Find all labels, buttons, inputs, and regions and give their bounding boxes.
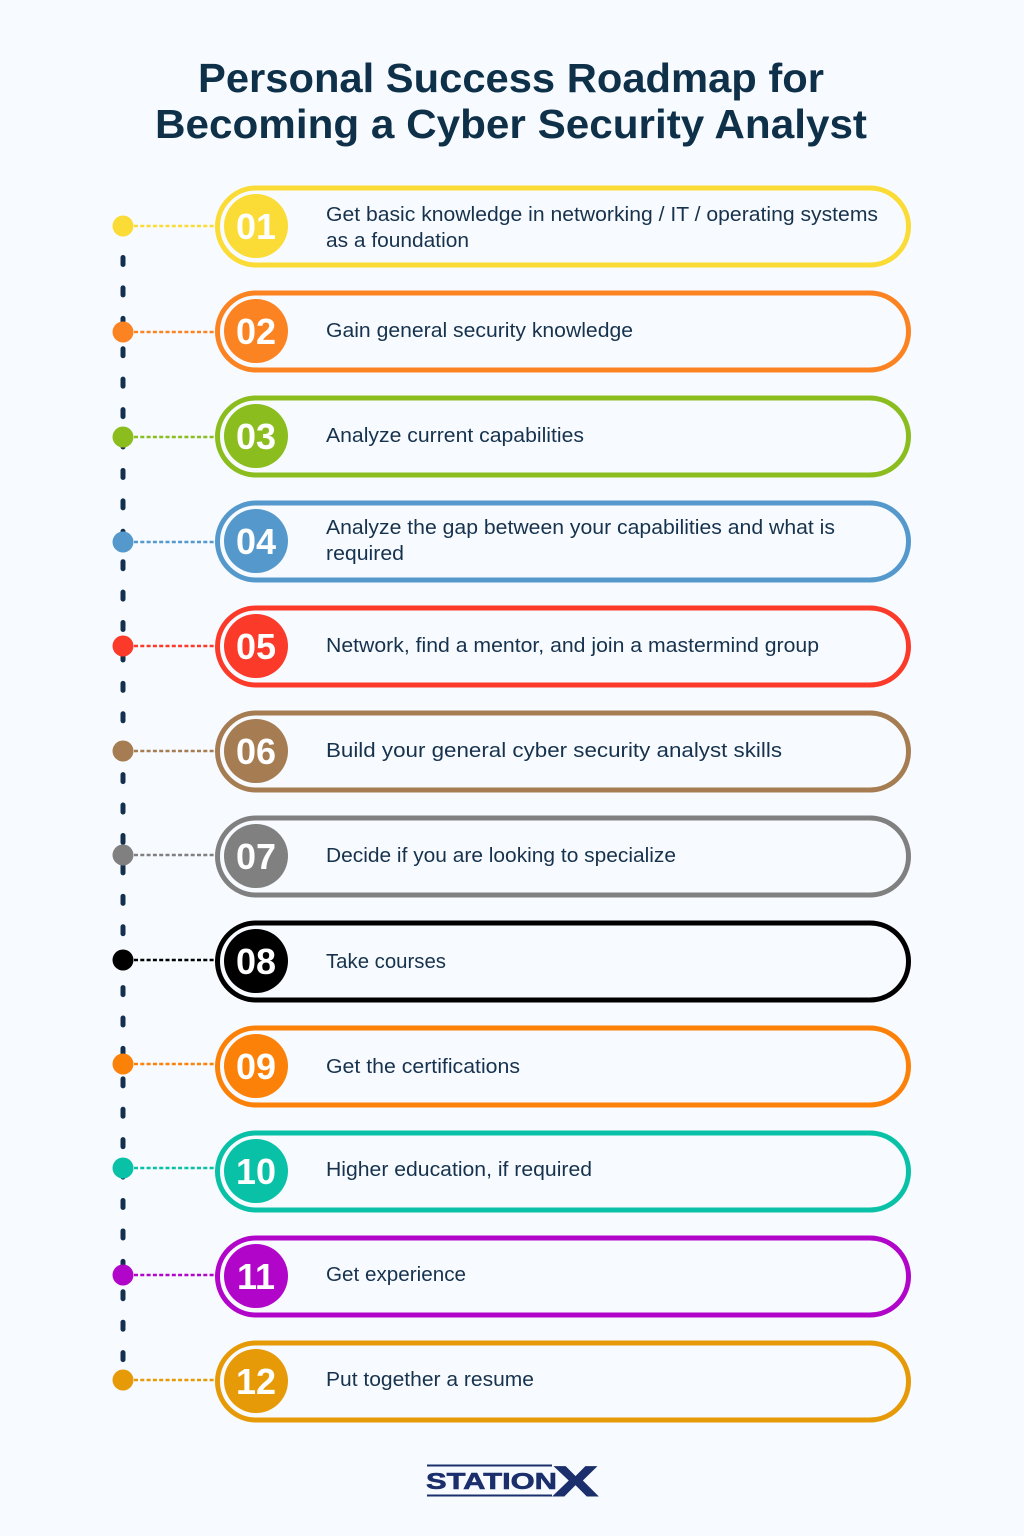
title: Personal Success Roadmap for: [198, 55, 824, 101]
step 07: [112, 818, 908, 895]
title: [155, 55, 867, 147]
step 01: 01: [236, 206, 276, 247]
step 12: 12: [236, 1361, 276, 1402]
step 03: [112, 398, 908, 475]
step 06: Build your general cyber security analyst skills: [326, 740, 782, 762]
step 04: required: [326, 543, 404, 565]
step 12: Put together a resume: [326, 1369, 534, 1391]
timeline dashed line: [120, 258, 126, 1362]
step 09: 09: [236, 1046, 276, 1087]
step 04: Analyze the gap between your capabilities and what is: [326, 517, 835, 539]
step 01: Get basic knowledge in networking / IT / operating systems: [326, 204, 878, 226]
step 02: [112, 293, 908, 370]
step 11: [112, 1238, 908, 1315]
step 11: 11: [237, 1256, 275, 1297]
step 10: 10: [236, 1151, 276, 1192]
step 08: Take courses: [326, 951, 446, 973]
step 12: [112, 1343, 908, 1420]
step 05: [112, 608, 908, 685]
step 07: 07: [236, 836, 276, 877]
step 06: [112, 713, 908, 790]
step 11: Get experience: [326, 1264, 466, 1286]
step 04: 04: [236, 521, 276, 562]
title: Becoming a Cyber Security Analyst: [155, 101, 867, 147]
step 08: 08: [236, 941, 276, 982]
step 05: 05: [236, 626, 276, 667]
logo: StationX: X: [553, 1458, 598, 1506]
step 09: Get the certifications: [326, 1056, 520, 1078]
step 03: Analyze current capabilities: [326, 425, 584, 447]
step 07: Decide if you are looking to specialize: [326, 845, 676, 867]
step 10: Higher education, if required: [326, 1159, 592, 1181]
logo: StationX: [426, 1458, 598, 1506]
step 06: 06: [236, 731, 276, 772]
step 01: [112, 188, 908, 265]
step 08: [112, 923, 908, 1000]
step 10: [112, 1133, 908, 1210]
step 02: 02: [236, 311, 276, 352]
step 09: [112, 1028, 908, 1105]
step 02: Gain general security knowledge: [326, 320, 633, 342]
step 01: as a foundation: [326, 230, 469, 252]
step 04: [112, 503, 908, 580]
step 03: 03: [236, 416, 276, 457]
logo: StationX: STATION: [426, 1468, 557, 1494]
step 05: Network, find a mentor, and join a mastermind group: [326, 635, 819, 657]
